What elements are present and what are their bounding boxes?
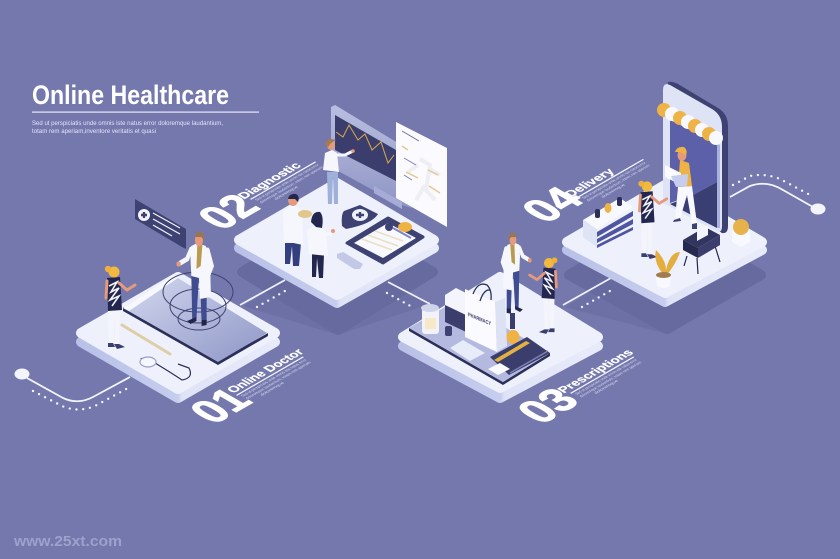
table with laptop (683, 225, 720, 274)
label: prescriptions: Prescriptions (554, 347, 637, 395)
panel: 03 prescriptions (403, 233, 598, 398)
thermometer (122, 325, 170, 354)
connector line 1 to 2 (240, 280, 285, 307)
presenter doctor (323, 139, 355, 204)
intro text: Sed ut perspiciatis unde omnis iste natus error doloremque laudantium, (32, 120, 223, 127)
doctor (176, 232, 212, 326)
label: prescriptions: Sed ut perspiciatis unde omnis iste natus error (573, 358, 639, 396)
label: delivery: Sed ut perspiciatis unde omnis iste natus error (580, 161, 648, 200)
label: online doctor: Sed ut perspiciatis unde omnis iste natus error (239, 358, 308, 398)
platform 1 (81, 277, 275, 398)
doctor (502, 233, 532, 314)
pill pack (490, 337, 550, 375)
connector line 2 to 3 (387, 282, 430, 308)
connector line 3 to 4 (563, 278, 611, 307)
end node curve (730, 175, 826, 214)
title underline (32, 112, 259, 113)
panel: 02 diagnostic (239, 105, 447, 303)
pill jar (421, 304, 439, 334)
clipboard (347, 218, 423, 263)
tablet (123, 275, 268, 365)
label: online doctor: doloremque (259, 381, 286, 397)
customer (638, 181, 667, 259)
phone tray (409, 300, 550, 385)
watermark: www.25xt.com (13, 534, 122, 550)
label: delivery: doloremque laudantium, totam rem aperiam (585, 163, 652, 202)
start node curve (14, 368, 130, 410)
panel: 04 delivery (567, 82, 762, 302)
shadow: platform 2 (242, 216, 433, 335)
label: delivery: Delivery (561, 166, 618, 199)
label: delivery: doloremque (600, 183, 627, 199)
title: Online Healthcare (32, 80, 229, 110)
female doctor (298, 210, 335, 278)
label: online doctor: Online Doctor (224, 347, 307, 395)
label: diagnostic: doloremque laudantium, totam rem aperiam (258, 165, 325, 204)
shield (342, 205, 378, 229)
small bottle (445, 326, 452, 336)
blister pack (450, 340, 485, 361)
potted plant (655, 250, 680, 288)
label: diagnostic: Sed ut perspiciatis unde omnis iste natus error (253, 163, 321, 202)
label: delivery (561, 152, 658, 208)
monitor (331, 105, 412, 209)
keypad (337, 252, 363, 269)
mortar with pestle (506, 313, 520, 344)
diagnostic sheet (396, 122, 447, 227)
label: online doctor: doloremque laudantium, totam rem aperiam (244, 360, 313, 400)
pharmacy bag (465, 284, 507, 352)
label: 01: 01 (178, 381, 262, 430)
label: 03: 03 (505, 381, 590, 430)
male doctor (283, 194, 311, 266)
platform 4 (567, 185, 762, 302)
speech bubble with cross (135, 199, 186, 249)
patient (105, 266, 135, 349)
patient (530, 257, 557, 334)
label: 02: 02 (186, 187, 270, 236)
pharmacy bag: PHARMACY (468, 312, 491, 328)
medicine box (445, 288, 466, 332)
label: diagnostic: doloremque (273, 185, 300, 201)
label: diagnostic: Diagnostic (234, 160, 305, 201)
phone storefront (663, 82, 728, 233)
shelf (583, 197, 633, 248)
label: diagnostic (234, 154, 330, 210)
delivery person (665, 147, 697, 229)
stethoscope (140, 357, 190, 380)
label: 04: 04 (510, 180, 595, 229)
label: prescriptions: doloremque laudantium, totam rem aperiam (578, 360, 643, 398)
platform 3 (403, 277, 598, 398)
label: prescriptions: doloremque (593, 379, 620, 395)
panel: 01 online doctor (81, 199, 275, 398)
cube planter (732, 219, 750, 247)
awning (657, 103, 723, 145)
pills (488, 363, 510, 375)
intro text: totam rem aperiam,inventore veritatis et quasi (32, 128, 156, 135)
platform 2 (239, 183, 434, 303)
shadow: platform 4 (565, 219, 761, 334)
hologram rings (163, 272, 233, 330)
